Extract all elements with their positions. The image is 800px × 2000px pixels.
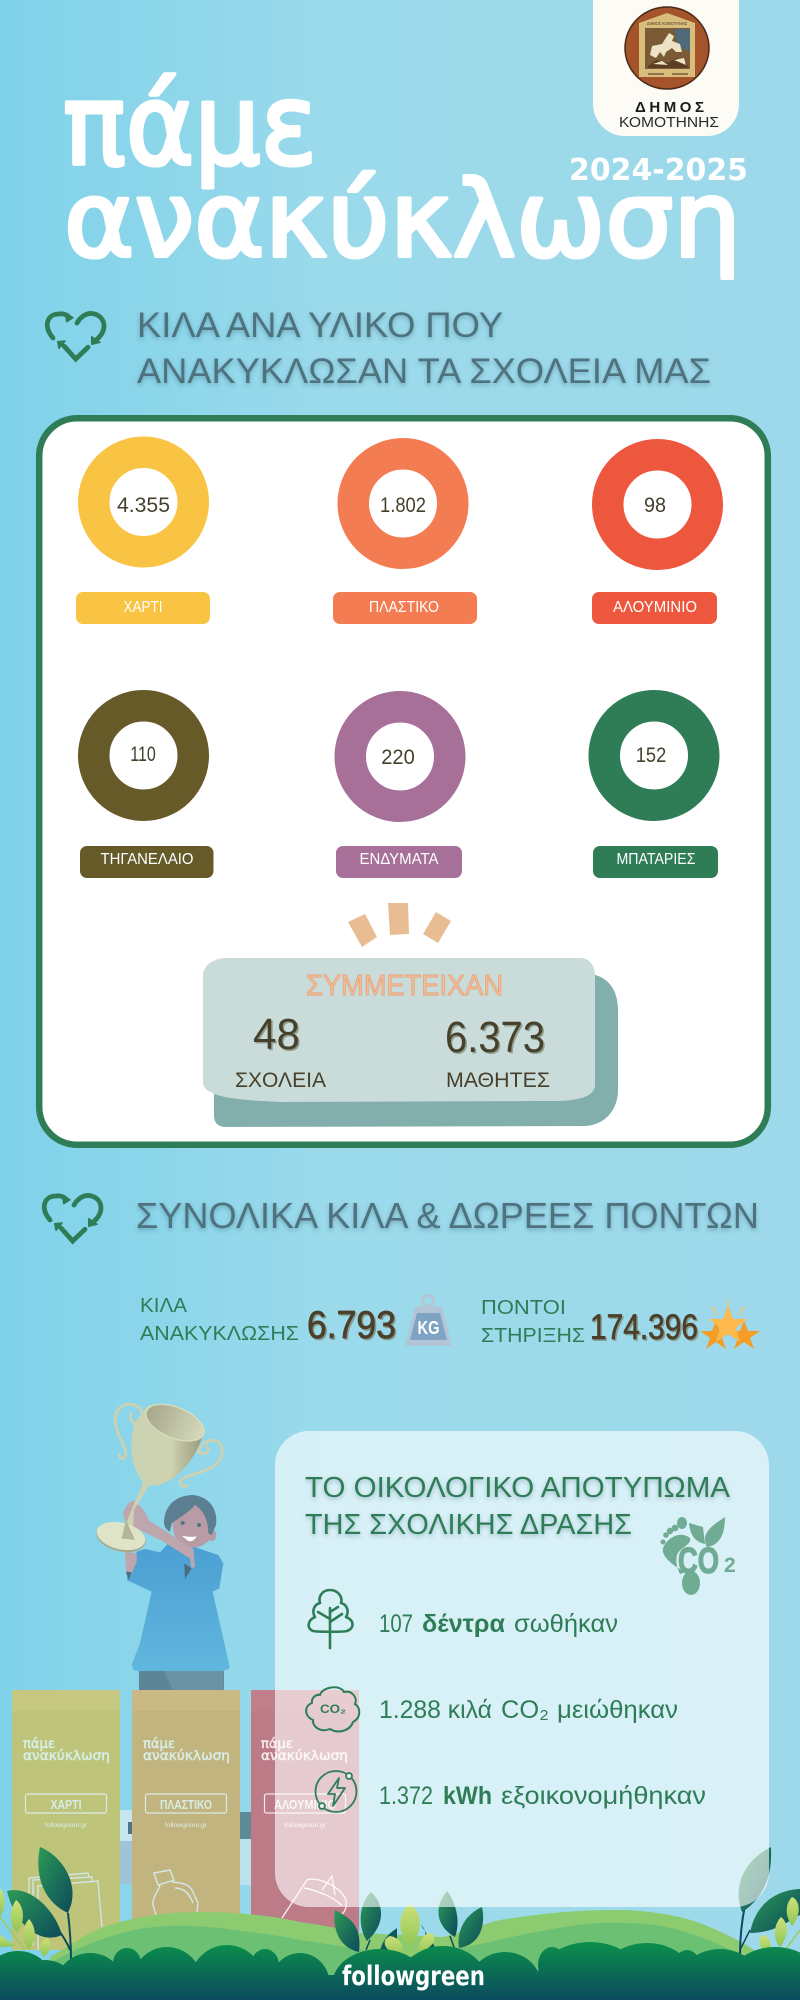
material: clothing: ΕΝΔΥΜΑΤΑ bbox=[360, 851, 439, 868]
bin: aluminium bbox=[251, 1690, 359, 1950]
material: plastic: 1.802 bbox=[380, 494, 426, 517]
material: batteries: 152 bbox=[636, 744, 666, 767]
text: trees saved bbox=[379, 1610, 618, 1638]
bin: aluminium: followgreen.gr bbox=[284, 1822, 327, 1829]
text: energy saved: kWh bbox=[443, 1782, 492, 1810]
bin: plastic: ΠΛΑΣΤΙΚΟ bbox=[160, 1798, 212, 1812]
icon: kg weight: KG bbox=[418, 1318, 440, 1338]
stat: support points: ΠΟΝΤΟΙ bbox=[481, 1297, 566, 1319]
text: trees saved: δέντρα bbox=[422, 1610, 506, 1638]
text: CO2 reduced: CO₂ bbox=[501, 1696, 549, 1724]
material: clothing: 220 bbox=[381, 746, 415, 769]
material: clothing bbox=[336, 707, 462, 878]
bin: plastic: ανακύκλωση bbox=[143, 1749, 230, 1764]
heading: οικολογικό αποτύπωμα: ΤΟ ΟΙΚΟΛΟΓΙΚΟ ΑΠΟΤΥΠΩΜΑ bbox=[305, 1472, 731, 1504]
logo: Δήμος Κομοτηνής: ΔΗΜΟΣ ΚΟΜΟΤΗΝΗΣ bbox=[647, 21, 687, 26]
logo: followgreen: followgreen bbox=[342, 1961, 485, 1992]
title: ανακύκλωση bbox=[64, 159, 741, 281]
bin: paper: followgreen.gr bbox=[45, 1822, 88, 1829]
icon: tree bbox=[309, 1590, 353, 1648]
bin: aluminium: πάμε bbox=[261, 1737, 293, 1752]
stat: support points: 174.396 bbox=[590, 1308, 698, 1347]
heading: κιλά ανά υλικό bbox=[137, 306, 711, 391]
material: aluminium bbox=[592, 455, 717, 624]
material: batteries: ΜΠΑΤΑΡΙΕΣ bbox=[616, 851, 696, 868]
panel: ecological footprint bbox=[275, 1431, 769, 1907]
material: frying oil: ΤΗΓΑΝΕΛΑΙΟ bbox=[100, 851, 194, 868]
logo: Δήμος Κομοτηνής: ΔΗΜΟΣ bbox=[635, 99, 704, 116]
bin: plastic bbox=[132, 1690, 240, 1950]
icon: peach burst marks bbox=[348, 903, 451, 947]
material: aluminium: ΑΛΟΥΜΙΝΙΟ bbox=[613, 599, 697, 616]
callout: participants: ΜΑΘΗΤΕΣ bbox=[446, 1069, 550, 1092]
icon: energy bbox=[316, 1771, 356, 1812]
text: energy saved: 1.372 bbox=[379, 1782, 433, 1810]
callout: participants bbox=[203, 958, 618, 1127]
illustration: hills bbox=[50, 1910, 775, 2000]
text: trees saved: σωθήκαν bbox=[514, 1610, 618, 1638]
stat: recycling kilos: 6.793 bbox=[307, 1304, 396, 1347]
callout: participants: ΣΥΜΜΕΤΕΙΧΑΝ bbox=[306, 970, 503, 1002]
illustration: bushes bbox=[0, 1942, 800, 2000]
bin: aluminium: ανακύκλωση bbox=[261, 1749, 348, 1764]
stat: support points bbox=[481, 1297, 698, 1347]
text: trees saved: 107 bbox=[379, 1610, 413, 1638]
icon: recycling heart 2 bbox=[44, 1195, 101, 1241]
icon: CO2 footprint bbox=[660, 1517, 736, 1595]
bin: aluminium: ΑΛΟΥΜΙΝΙΟ bbox=[274, 1798, 336, 1812]
stat: recycling kilos: ΚΙΛΑ bbox=[140, 1295, 188, 1317]
heading: κιλά ανά υλικό: ΚΙΛΑ ΑΝΑ ΥΛΙΚΟ ΠΟΥ bbox=[137, 306, 503, 345]
bin: paper bbox=[12, 1690, 120, 1950]
illustration: right plant bbox=[739, 1847, 800, 1955]
illustration: left and centre plants bbox=[0, 1847, 483, 1960]
bin: paper: πάμε bbox=[23, 1737, 55, 1752]
icon: recycling heart bbox=[47, 313, 104, 359]
heading: οικολογικό αποτύπωμα bbox=[305, 1472, 731, 1541]
text: CO2 reduced: μειώθηκαν bbox=[557, 1696, 678, 1724]
icon: kg weight bbox=[406, 1296, 451, 1345]
callout: participants: ΣΧΟΛΕΙΑ bbox=[235, 1069, 326, 1092]
logo: Δήμος Κομοτηνής: ΚΟΜΟΤΗΝΗΣ bbox=[619, 115, 719, 131]
bin: paper: ανακύκλωση bbox=[23, 1749, 110, 1764]
bin: plastic: followgreen.gr bbox=[165, 1822, 208, 1829]
panel: materials card bbox=[39, 418, 768, 1145]
material: frying oil bbox=[80, 706, 214, 878]
material: plastic: ΠΛΑΣΤΙΚΟ bbox=[369, 599, 439, 616]
icon: CO2 footprint: CO bbox=[678, 1540, 719, 1581]
bin: plastic: πάμε bbox=[143, 1737, 175, 1752]
title bbox=[63, 61, 741, 281]
text: CO2 reduced bbox=[379, 1696, 678, 1724]
callout: participants: 6.373 bbox=[445, 1013, 545, 1062]
icon: CO2 cloud bbox=[306, 1687, 359, 1731]
heading: οικολογικό αποτύπωμα: ΤΗΣ ΣΧΟΛΙΚΗΣ ΔΡΑΣΗΣ bbox=[305, 1509, 632, 1541]
callout: participants: 48 bbox=[253, 1010, 300, 1059]
material: paper bbox=[76, 452, 210, 624]
material: frying oil: 110 bbox=[130, 743, 156, 766]
stat: recycling kilos bbox=[140, 1295, 396, 1347]
icon: CO2 footprint: 2 bbox=[724, 1554, 736, 1577]
material: aluminium: 98 bbox=[644, 494, 666, 517]
heading: κιλά ανά υλικό: ΑΝΑΚΥΚΛΩΣΑΝ ΤΑ ΣΧΟΛΕΙΑ ΜΑΣ bbox=[137, 352, 711, 391]
title: πάμε bbox=[63, 61, 317, 191]
stat: support points: ΣΤΗΡΙΞΗΣ bbox=[481, 1325, 585, 1347]
text: energy saved: εξοικονομήθηκαν bbox=[501, 1782, 706, 1810]
material: batteries bbox=[593, 706, 718, 878]
icon: CO2 cloud: CO₂ bbox=[320, 1704, 346, 1716]
illustration: child with trophy and bins bbox=[12, 1397, 359, 1950]
heading: συνολικά κιλά: ΣΥΝΟΛΙΚΑ ΚΙΛΑ & ΔΩΡΕΕΣ ΠΟΝΤΩΝ bbox=[136, 1195, 759, 1236]
material: paper: ΧΑΡΤΙ bbox=[124, 599, 162, 616]
illustration: child lifting trophy bbox=[93, 1397, 230, 1691]
year: 2024-2025 bbox=[569, 153, 748, 188]
text: energy saved bbox=[379, 1782, 706, 1810]
illustration: disc behind bins bbox=[120, 1810, 251, 1885]
logo: Δήμος Κομοτηνής bbox=[593, 0, 739, 136]
icon: stars bbox=[700, 1300, 760, 1349]
stat: recycling kilos: ΑΝΑΚΥΚΛΩΣΗΣ bbox=[140, 1323, 299, 1345]
text: CO2 reduced: 1.288 κιλά bbox=[379, 1696, 492, 1724]
material: plastic bbox=[333, 454, 477, 624]
material: paper: 4.355 bbox=[117, 494, 170, 517]
bin: paper: ΧΑΡΤΙ bbox=[50, 1798, 82, 1812]
